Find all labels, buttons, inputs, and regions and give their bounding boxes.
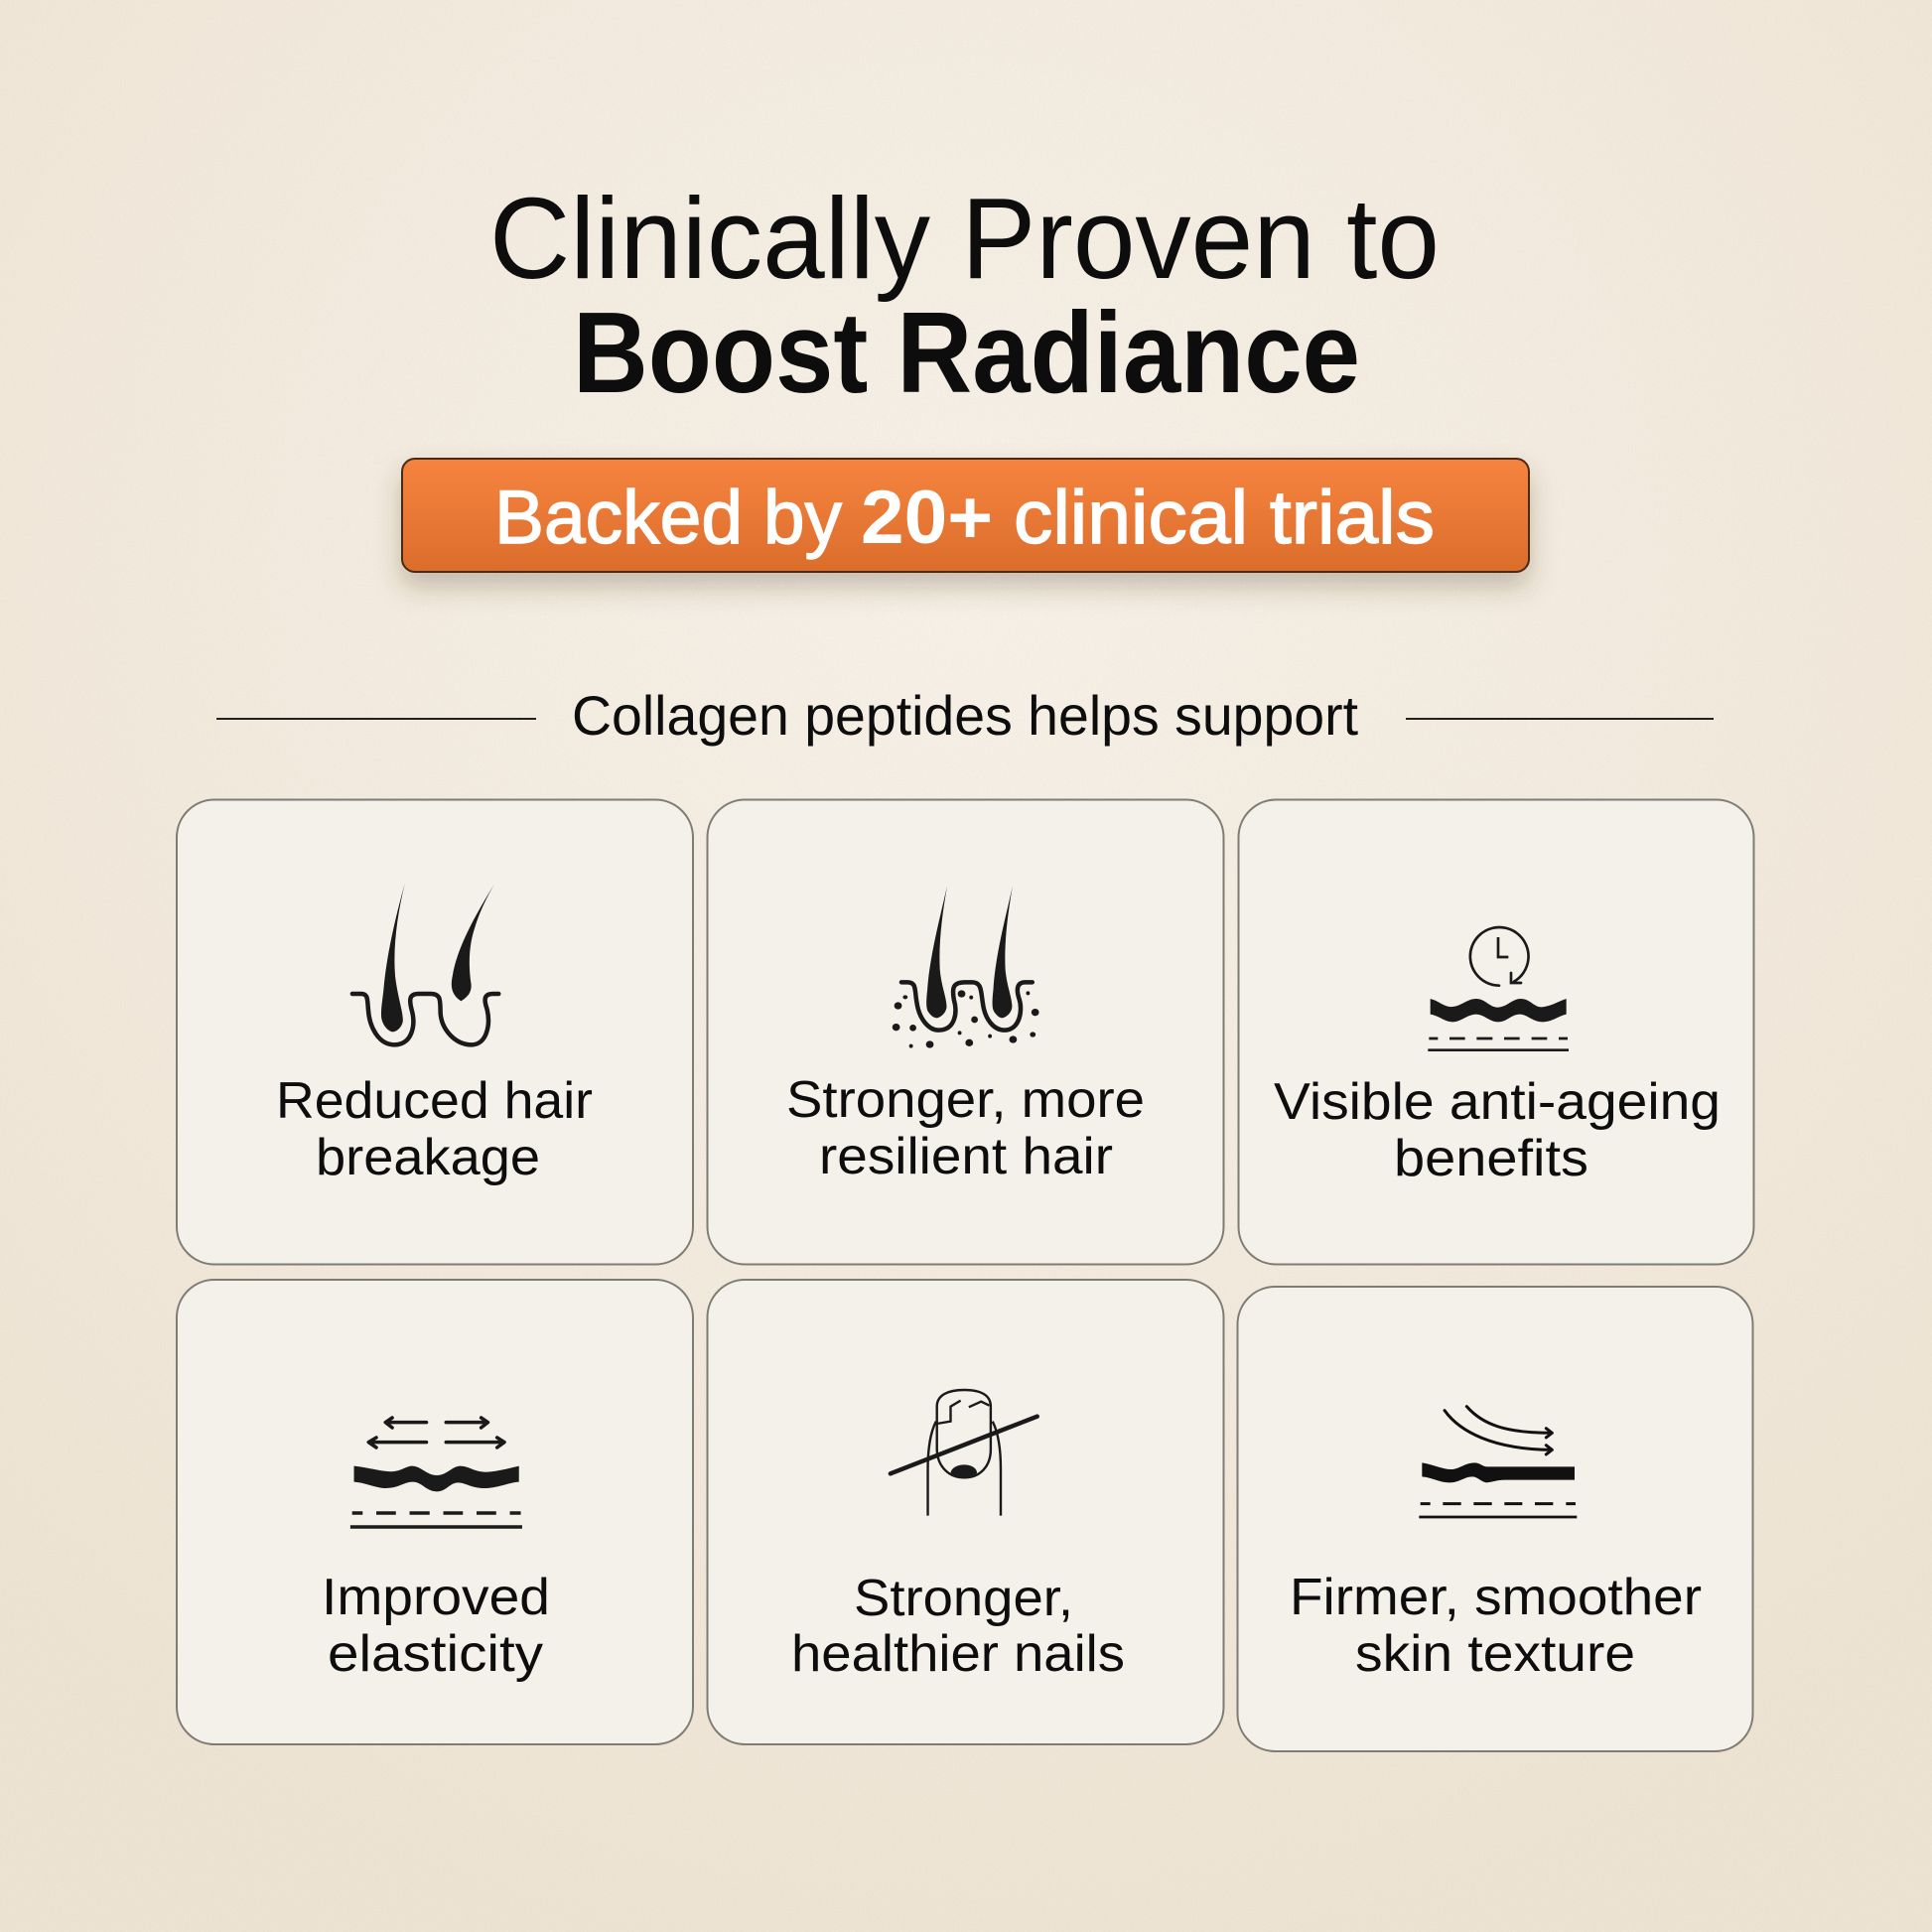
caption: resilient hair xyxy=(819,1128,1113,1185)
badge background xyxy=(402,459,1529,572)
caption: breakage xyxy=(316,1129,540,1186)
caption: skin texture xyxy=(1355,1625,1635,1683)
icon: stretching skin xyxy=(350,1418,522,1527)
caption: Improved xyxy=(322,1569,550,1626)
title xyxy=(489,174,1440,417)
panel: visible anti-ageing benefits xyxy=(1239,800,1753,1265)
caption: Visible anti-ageing xyxy=(1274,1073,1721,1131)
caption: healthier nails xyxy=(791,1625,1125,1683)
orange badge xyxy=(402,459,1529,572)
badge text: clinical trials xyxy=(1014,476,1435,560)
badge text: Backed by xyxy=(494,476,842,560)
caption xyxy=(791,1570,1125,1683)
title line 1: Clinically Proven to xyxy=(489,174,1440,303)
caption: benefits xyxy=(1394,1130,1588,1187)
caption xyxy=(1290,1569,1702,1683)
panel: stronger, more resilient hair xyxy=(707,800,1223,1265)
subheading: Collagen peptides helps support xyxy=(572,684,1358,747)
icon: smoothing skin xyxy=(1419,1407,1577,1517)
caption: elasticity xyxy=(328,1625,543,1683)
badge text xyxy=(494,476,1435,560)
caption: Stronger, more xyxy=(786,1071,1145,1129)
caption xyxy=(1274,1073,1721,1187)
caption: Stronger, xyxy=(854,1570,1073,1627)
icon: hair follicles xyxy=(352,884,498,1044)
icon: clock over skin wave xyxy=(1428,927,1569,1050)
badge text: 20+ xyxy=(861,476,993,560)
panel: firmer, smoother skin texture xyxy=(1237,1287,1753,1751)
icon: follicles with dots xyxy=(893,887,1039,1048)
panel: stronger, healthier nails xyxy=(707,1280,1223,1744)
caption xyxy=(786,1071,1145,1185)
title line 2: Boost Radiance xyxy=(573,288,1360,417)
panel: improved elasticity xyxy=(177,1280,693,1744)
caption xyxy=(322,1569,550,1683)
caption: Firmer, smoother xyxy=(1290,1569,1702,1626)
icon: fingernail xyxy=(891,1390,1037,1516)
caption: Reduced hair xyxy=(276,1072,593,1130)
panel: reduced hair breakage xyxy=(177,800,693,1265)
caption xyxy=(276,1072,593,1186)
